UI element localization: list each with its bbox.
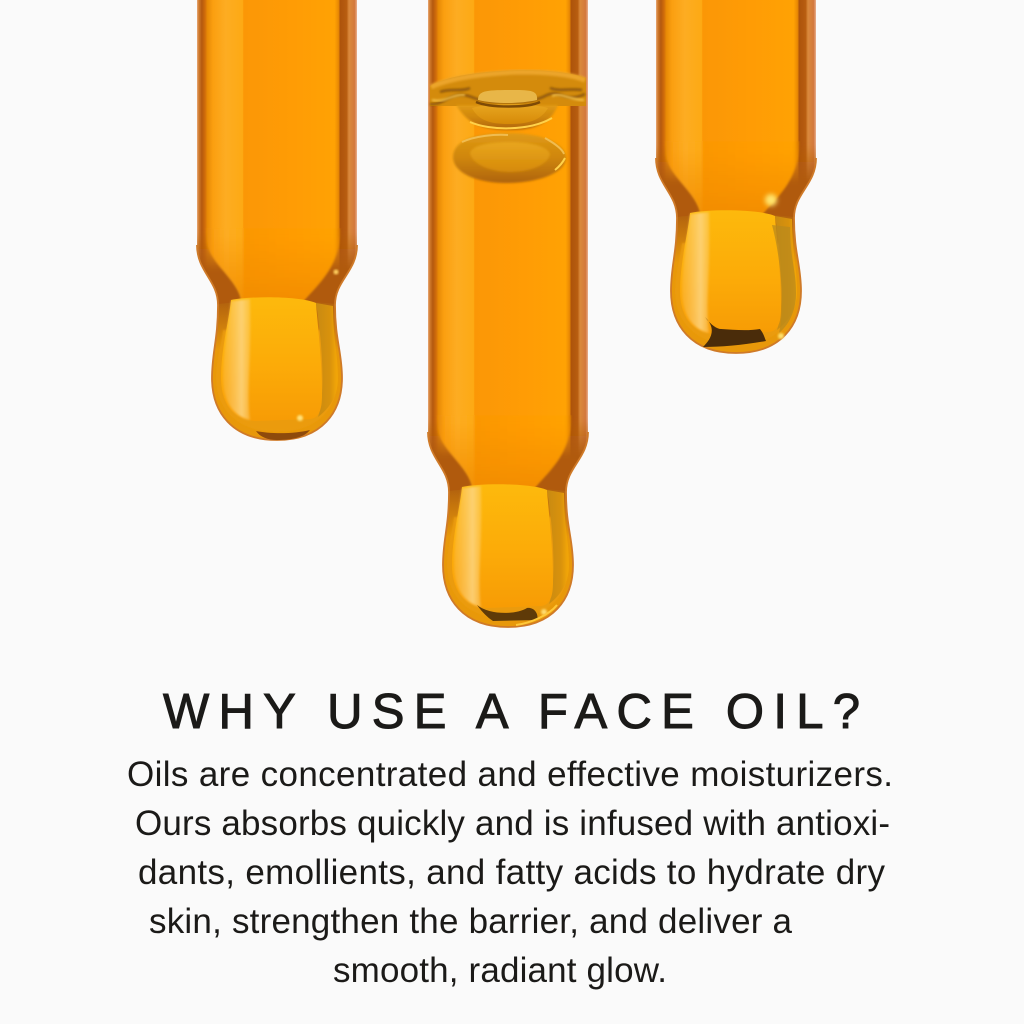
right dropper highlight glint (765, 194, 777, 206)
body paragraph (127, 755, 893, 990)
title: WHY USE A FACE OIL? (163, 685, 860, 739)
center oil dropper (421, 0, 595, 627)
body paragraph: dants, emollients, and fatty acids to hydrate dry (138, 853, 886, 892)
center dropper bottom reflection (477, 605, 557, 625)
right oil dropper (649, 0, 823, 353)
upper bubble (456, 90, 558, 130)
left dropper bottom reflection (256, 270, 338, 440)
body paragraph: smooth, radiant glow. (333, 951, 667, 990)
lower bubble (453, 133, 566, 183)
meniscus surface band (430, 70, 586, 106)
right dropper bottom reflection (703, 317, 784, 347)
body paragraph: skin, strengthen the barrier, and deliver a (149, 902, 793, 941)
oil bubble meniscus in center dropper (430, 70, 586, 183)
body paragraph: Ours absorbs quickly and is infused with antioxi- (135, 804, 890, 843)
left oil dropper (190, 0, 364, 440)
right dropper olive side band (772, 225, 796, 333)
body paragraph: Oils are concentrated and effective moisturizers. (127, 755, 893, 794)
